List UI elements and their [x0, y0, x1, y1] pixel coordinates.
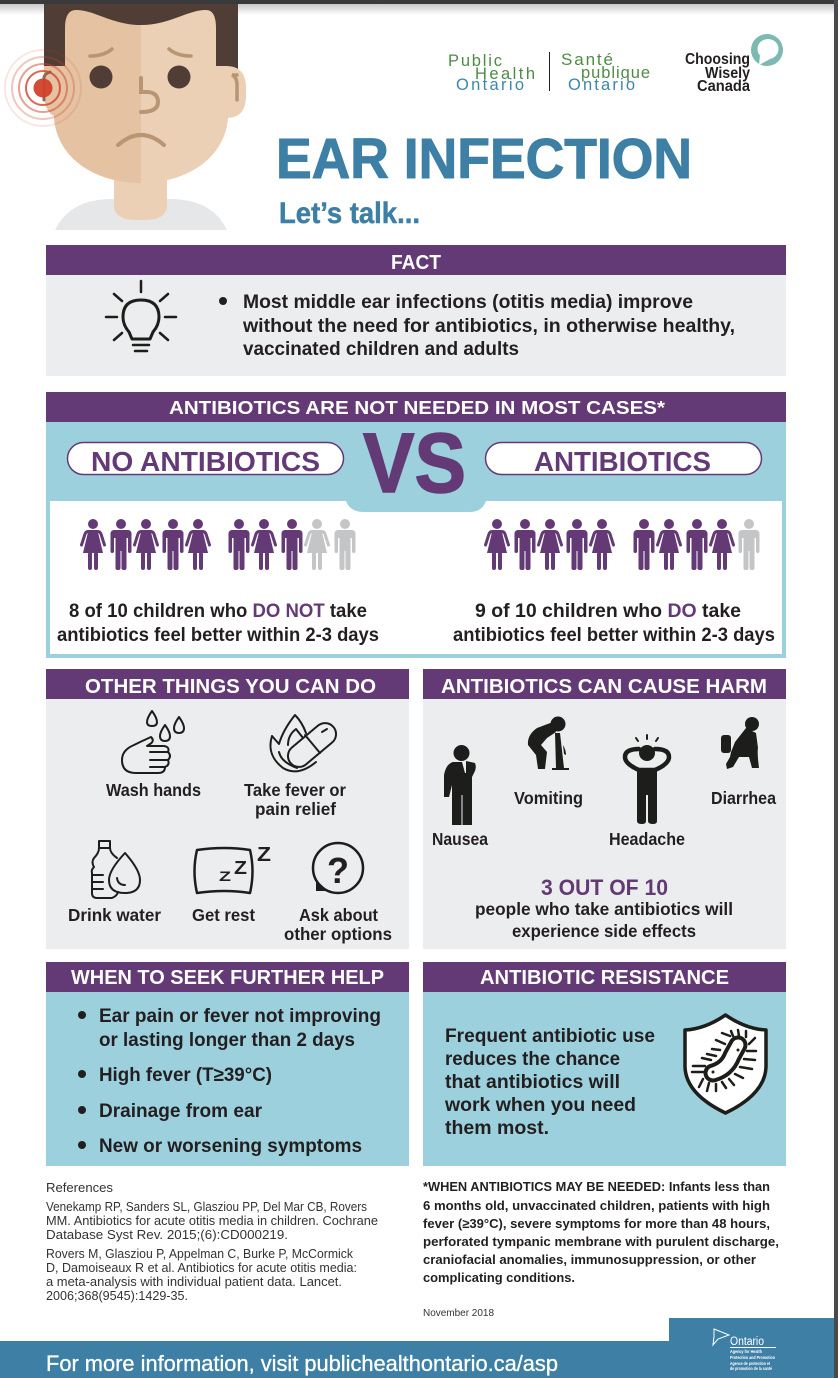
logo: Public Health Ontario: Health	[475, 65, 535, 83]
note: when antibiotics may be needed: craniofacial anomalies, immunosuppression, or other	[423, 1252, 756, 1267]
label: diarrhea: Diarrhea	[711, 788, 776, 808]
note: when antibiotics may be needed: 6 months old, unvaccinated children, patients with high	[423, 1198, 770, 1213]
icon: wash hands	[122, 711, 184, 773]
text: side effects: experience side effects	[512, 921, 696, 941]
list: warning signs: High fever (T≥39°C)	[99, 1064, 272, 1086]
panel: other things you can do	[46, 669, 409, 949]
heading: fact: FACT	[391, 252, 441, 274]
label: ask about other options	[284, 905, 392, 944]
panel: antibiotics comparison	[46, 392, 786, 658]
logo: Ontario agency	[713, 1329, 776, 1371]
references: D, Damoiseaux R et al. Antibiotics for acute otitis media:	[46, 1261, 357, 1275]
pictogram: 8 of 10	[82, 519, 356, 570]
icon: pillow and zzz	[194, 844, 271, 893]
references: a meta-analysis with individual patient data. Lancet.	[46, 1275, 342, 1289]
footer	[0, 1318, 834, 1378]
logo: Public Health Ontario: Ontario	[456, 76, 524, 94]
label: drink water: Drink water	[68, 905, 161, 925]
references: MM. Antibiotics for acute otitis media in children. Cochrane	[46, 1214, 378, 1228]
logo: Public Health Ontario: Public	[448, 52, 502, 70]
icon: pillow and zzz: Z	[219, 868, 232, 884]
logo: Public Health Ontario: Santé	[561, 50, 613, 69]
icon: pillow and zzz: Z	[257, 844, 271, 866]
label: antibiotics	[486, 442, 762, 477]
panel: fact	[46, 245, 786, 376]
references: Venekamp RP, Sanders SL, Glasziou PP, Del Mar CB, Rovers	[46, 1200, 367, 1214]
icon: fever and pain relief	[270, 715, 341, 771]
panel: antibiotic resistance	[423, 962, 786, 1166]
list: warning signs: New or worsening symptoms	[99, 1135, 362, 1157]
note: when antibiotics may be needed: fever (≥39°C), severe symptoms for more than 48 hours,	[423, 1216, 770, 1231]
icon: nausea	[444, 745, 476, 825]
list: warning signs: Drainage from ear	[99, 1100, 262, 1122]
label: fever or pain relief: pain relief	[255, 799, 336, 819]
text: resistance: work when you need	[444, 1094, 636, 1116]
icon: question bubble: ?	[327, 850, 349, 891]
logo: Ontario agency: Agency for Health	[730, 1349, 762, 1354]
references: References	[46, 1181, 113, 1195]
text: resistance: reduces the chance	[445, 1048, 620, 1070]
logo: Choosing Wisely Canada: Choosing	[685, 51, 750, 68]
subtitle: Let’s talk...	[279, 197, 420, 230]
references	[46, 1181, 378, 1303]
pictogram: 9 of 10	[486, 519, 760, 570]
title: EAR INFECTION	[276, 127, 692, 191]
fact text: without the need for antibiotics, in otherwise healthy,	[242, 315, 735, 337]
footer text: For more information, visit publichealthontario.ca/asp	[46, 1351, 558, 1376]
label: fever or pain relief	[244, 780, 346, 819]
heading: other things: OTHER THINGS YOU CAN DO	[85, 676, 376, 698]
list: warning signs	[78, 1005, 381, 1157]
icon: vomiting	[528, 716, 569, 770]
label: no antibiotics: NO ANTIBIOTICS	[91, 446, 320, 477]
label: nausea: Nausea	[432, 829, 488, 849]
logo: Choosing Wisely Canada: Wisely	[705, 65, 750, 82]
text: no antibiotics result: antibiotics feel better within 2-3 days	[57, 624, 379, 646]
text: side effects	[475, 899, 733, 941]
references: Database Syst Rev. 2015;(6):CD000219.	[46, 1228, 288, 1242]
list: warning signs: Ear pain or fever not improving	[99, 1005, 381, 1027]
logo: Ontario agency: Ontario	[730, 1336, 764, 1348]
logo: Ontario agency: de promotion de la santé	[730, 1366, 772, 1371]
label: vomiting: Vomiting	[514, 788, 583, 808]
label: headache: Headache	[609, 829, 685, 849]
icon: pillow and zzz: Z	[234, 858, 247, 878]
icon: light bulb	[106, 281, 176, 351]
text: resistance: that antibiotics will	[445, 1071, 620, 1093]
icon: headache	[625, 735, 669, 824]
label: ask about other options: Ask about	[299, 905, 378, 925]
panel: when to seek further help	[46, 962, 409, 1166]
note: when antibiotics may be needed	[423, 1179, 779, 1285]
label: wash hands: Wash hands	[106, 780, 201, 800]
list: warning signs: or lasting longer than 2 days	[99, 1029, 355, 1051]
text: no antibiotics result: 8 of 10 children who DO NOT take	[69, 600, 367, 622]
text: antibiotics result: antibiotics feel better within 2-3 days	[453, 624, 775, 646]
heading: antibiotics not needed: ANTIBIOTICS ARE NOT NEEDED IN MOST CASES*	[169, 398, 665, 418]
fact text	[219, 291, 735, 360]
VS: VS	[363, 416, 466, 510]
logo: Choosing Wisely Canada	[685, 34, 783, 95]
heading: cause harm: ANTIBIOTICS CAN CAUSE HARM	[441, 676, 767, 698]
heading: resistance: ANTIBIOTIC RESISTANCE	[480, 967, 729, 989]
label: antibiotics: ANTIBIOTICS	[534, 446, 711, 477]
note: when antibiotics may be needed: *WHEN ANTIBIOTICS MAY BE NEEDED: Infants less than	[423, 1179, 770, 1194]
logo: Ontario agency: Protection and Promotion	[730, 1355, 775, 1360]
text: resistance	[444, 1025, 655, 1139]
fact text: vaccinated children and adults	[243, 338, 519, 360]
icon: water bottle and drop	[92, 841, 140, 898]
references: 2006;368(9545):1429-35.	[46, 1289, 188, 1303]
panel: antibiotics can cause harm	[423, 669, 786, 949]
logo: Public Health Ontario: publique	[581, 64, 650, 82]
text: antibiotics result	[453, 600, 775, 646]
text: no antibiotics result	[57, 600, 379, 646]
heading: seek help: WHEN TO SEEK FURTHER HELP	[71, 967, 384, 989]
icon: question bubble	[313, 843, 363, 893]
logo: Choosing Wisely Canada: Canada	[697, 78, 750, 95]
text: side effects: people who take antibiotics will	[475, 899, 733, 919]
fact text: Most middle ear infections (otitis media) improve	[243, 291, 693, 313]
text: resistance: them most.	[445, 1117, 549, 1139]
note: when antibiotics may be needed: perforated tympanic membrane with purulent discharge,	[423, 1234, 779, 1249]
illustration: man with ear pain	[5, 4, 246, 230]
note: when antibiotics may be needed: complicating conditions.	[423, 1270, 575, 1285]
icon: diarrhea	[721, 717, 759, 769]
label: ask about other options: other options	[284, 924, 392, 944]
label: fever or pain relief: Take fever or	[244, 780, 346, 800]
text: antibiotics result: 9 of 10 children who DO take	[475, 600, 741, 622]
text: resistance: Frequent antibiotic use	[445, 1025, 655, 1047]
date: November 2018	[423, 1308, 494, 1319]
label: get rest: Get rest	[192, 905, 255, 925]
logo: Public Health Ontario: Ontario	[568, 76, 635, 94]
logo: Public Health Ontario	[448, 50, 650, 94]
icon: shield with bacterium	[685, 1015, 766, 1113]
references: Rovers M, Glasziou P, Appelman C, Burke P, McCormick	[46, 1247, 354, 1261]
logo: Ontario agency: Agence de protection et	[730, 1361, 770, 1366]
statistic: 3 out of 10: 3 OUT OF 10	[541, 875, 668, 900]
